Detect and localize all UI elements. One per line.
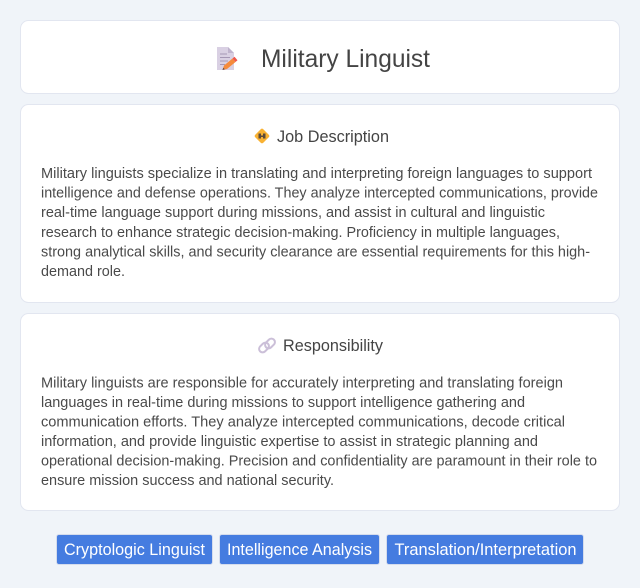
text block: job description: intelligence and defense operations. They analyze intercepted communications, provide	[41, 186, 598, 202]
panel: responsibility	[20, 314, 620, 510]
text block: job description: research to enhance strategic decision-making. Proficiency in multiple languages,	[41, 225, 560, 241]
text block: responsibility: ensure mission success and national security.	[41, 473, 334, 489]
tag: Translation/Interpretation: Translation/Interpretation	[394, 541, 576, 559]
text block: job description	[41, 166, 598, 280]
panel: title	[20, 20, 620, 94]
text block: responsibility: information, and provide linguistic expertise to assist in strategic planning and	[41, 434, 538, 450]
text block: responsibility: Military linguists are responsible for accurately interpreting and translating foreign	[41, 376, 563, 392]
tag: Intelligence Analysis: Intelligence Analysis	[227, 541, 372, 559]
text block: job description: demand role.	[41, 264, 125, 280]
icon: diamond badge	[254, 128, 270, 144]
heading: job description: Job Description	[277, 128, 389, 146]
text block: responsibility	[41, 376, 597, 489]
tag: Intelligence Analysis	[220, 534, 380, 564]
tag: Translation/Interpretation	[386, 534, 584, 564]
tag: Cryptologic Linguist: Cryptologic Linguist	[64, 541, 205, 559]
text block: job description: Military linguists specialize in translating and interpreting foreign languages to support	[41, 166, 592, 182]
icon: chain link	[258, 337, 276, 354]
text block: responsibility: operational decision-making. Precision and confidentiality are paramount in their role to	[41, 454, 597, 470]
tag: Cryptologic Linguist	[56, 534, 212, 564]
heading: responsibility: Responsibility	[283, 337, 384, 355]
title text: Military Linguist	[261, 45, 430, 73]
panel: job description	[20, 104, 620, 302]
text block: job description: real-time language support during missions, and assist in cultural and linguistic	[41, 205, 545, 221]
icon: document with pencil	[217, 47, 238, 70]
text block: job description: strong analytical skills, and security clearance are essential requirements for this high-	[41, 244, 590, 260]
text block: responsibility: languages in real-time during missions to support intelligence gathering and	[41, 395, 525, 411]
text block: responsibility: communication efforts. They analyze intercepted communications, decode critical	[41, 414, 565, 430]
